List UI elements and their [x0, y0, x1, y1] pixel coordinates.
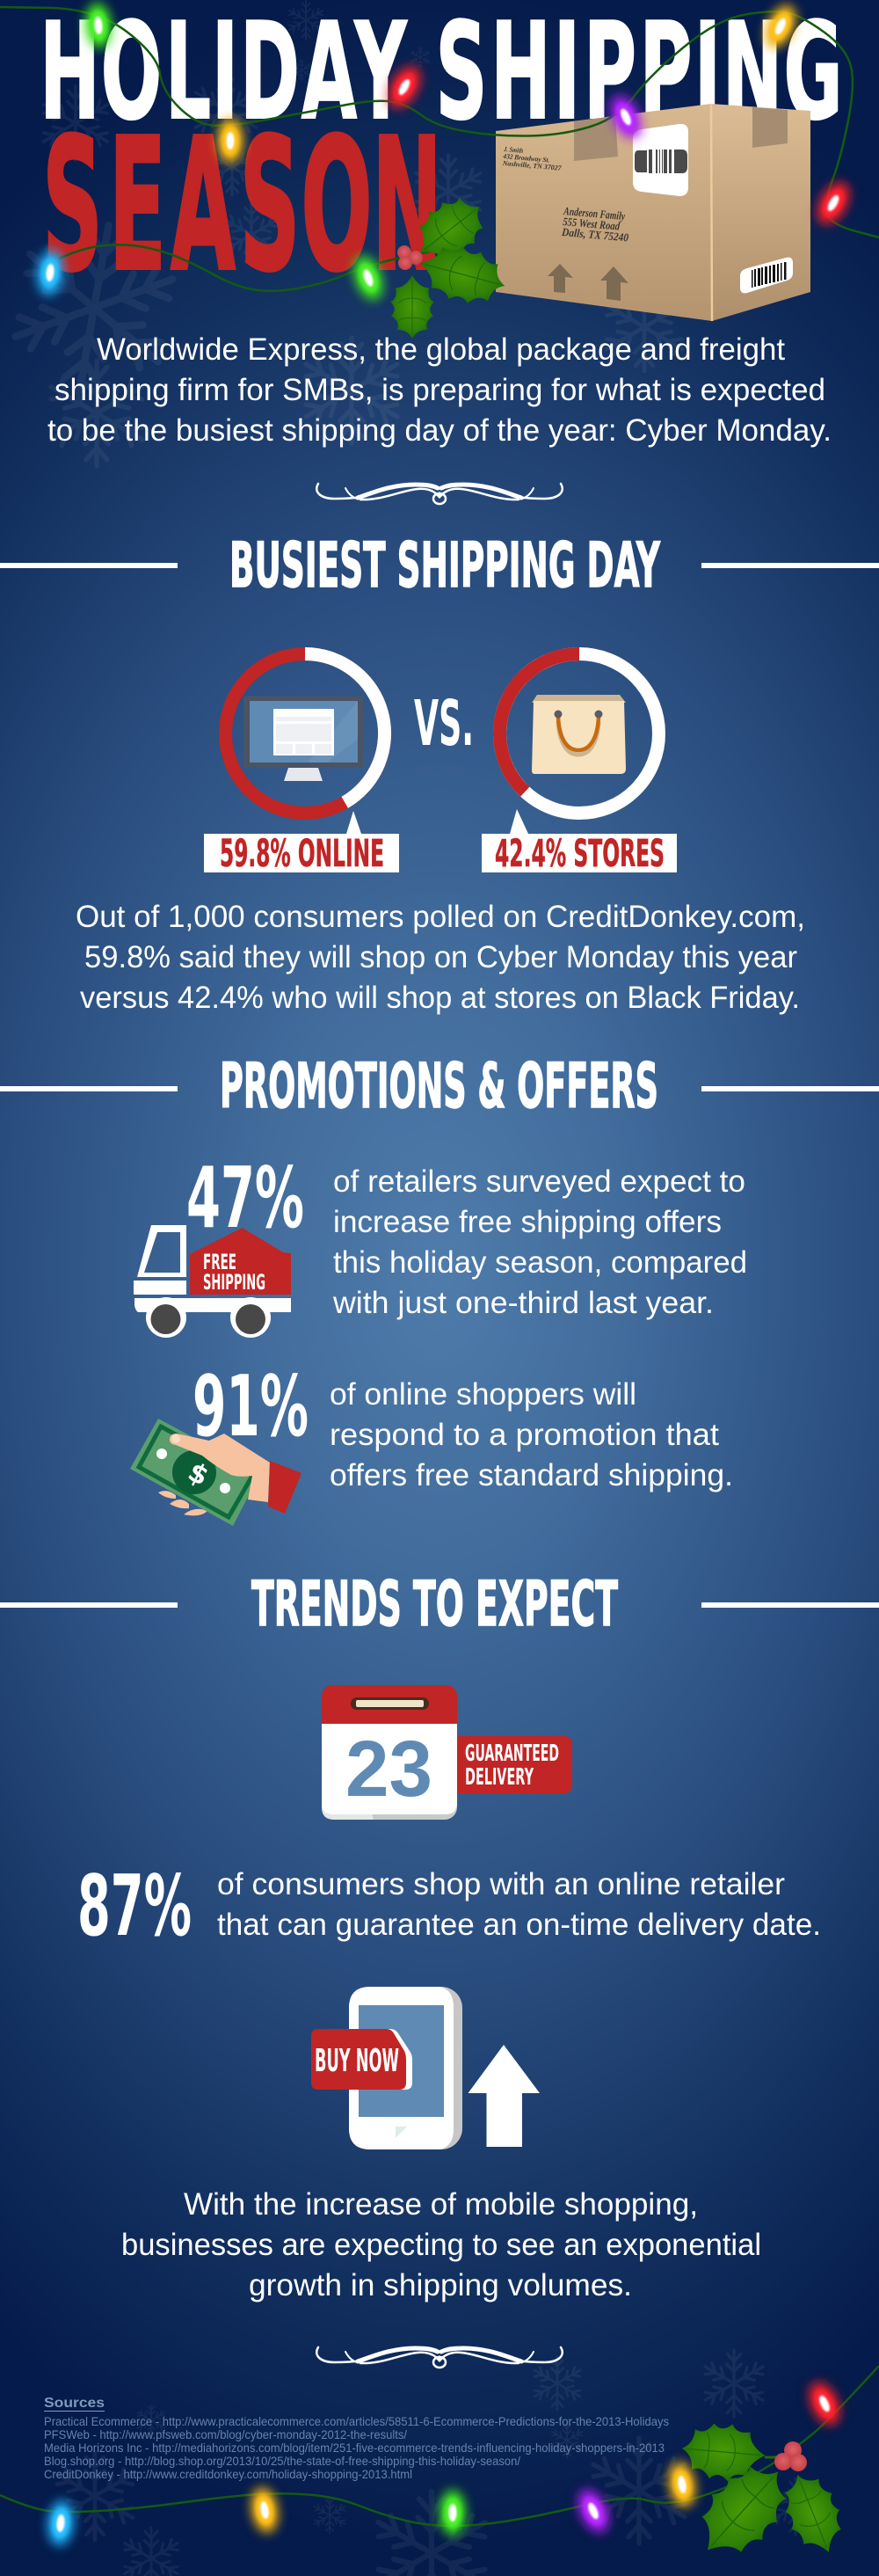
icon: free shipping truck: [134, 1225, 291, 1338]
text: retailers surveyed: with just one-third last year.: [332, 1286, 714, 1320]
text: mobile shopping: With the increase of mobile shopping,: [184, 2187, 698, 2222]
text: poll description: Out of 1,000 consumers polled on CreditDonkey.com,: [76, 900, 805, 934]
text: recipient address: Dalls, TX 75240: [561, 225, 629, 244]
light: red right: [810, 177, 856, 230]
text: retailers surveyed: this holiday season, compared: [333, 1245, 747, 1280]
light: purple bottom: [571, 2485, 615, 2537]
text: recipient address: [561, 204, 631, 244]
arrow: up: [468, 2045, 540, 2147]
text: mobile shopping: businesses are expecting to see an exponential: [121, 2228, 761, 2262]
icon: calendar guaranteed delivery: GUARANTEED: [465, 1740, 559, 1767]
intro text: to be the busiest shipping day of the year: Cyber Monday.: [47, 413, 832, 448]
callout: stores label: [482, 809, 677, 876]
light: purple: [604, 91, 648, 143]
icon: shopping bag: [532, 695, 626, 774]
ornament: divider top: [316, 484, 563, 504]
sources block: Media Horizons Inc - http://mediahorizons.com/blog/item/251-five-ecommerce-trends-influencing-holiday-shoppers-in-2013: [44, 2441, 665, 2455]
icon: free shipping truck: FREE: [203, 1250, 236, 1274]
text: poll description: 59.8% said they will shop on Cyber Monday this year: [84, 940, 797, 974]
text: retailers surveyed: increase free shipping offers: [333, 1205, 722, 1239]
light: yellow left: [217, 118, 243, 164]
light: blue bottom: [46, 2499, 76, 2547]
text: online shoppers: respond to a promotion that: [330, 1418, 719, 1452]
text: on-time delivery: of consumers shop with an online retailer: [217, 1867, 785, 1901]
text: retailers surveyed: [332, 1164, 747, 1320]
sources block: Practical Ecommerce - http://www.practicalecommerce.com/articles/58511-6-Ecommerce-Predictions-for-the-2013-Holidays: [44, 2414, 669, 2428]
text: sender address: J. Smith: [503, 145, 524, 155]
stat: 91 percent: 91%: [193, 1359, 309, 1456]
sources block: Sources: [44, 2396, 105, 2411]
text: online shoppers: offers free standard shipping.: [330, 1458, 733, 1492]
text: sender address: Nashville, TN 37027: [501, 159, 563, 172]
ornament: divider bottom: [316, 2347, 563, 2368]
text: sender address: [501, 145, 563, 172]
intro text: Worldwide Express, the global package and freight: [97, 332, 785, 367]
icon: calendar guaranteed delivery: DELIVERY: [465, 1764, 534, 1791]
string of lights wire: bottom: [0, 2366, 879, 2526]
intro text: [47, 332, 832, 448]
icon: calendar guaranteed delivery: [322, 1685, 572, 1820]
string of lights wire: lower left: [59, 244, 434, 291]
stat: 47 percent: 47%: [186, 1150, 304, 1247]
section divider lines: promotions: [0, 1086, 879, 1091]
string of lights wire: top: [0, 7, 879, 237]
text: on-time delivery: [217, 1867, 821, 1942]
title: season: SEASON: [42, 99, 442, 311]
light: yellow top right: [759, 0, 803, 53]
section divider lines: trends: [0, 1602, 879, 1608]
light: blue: [34, 249, 66, 296]
icon: phone with buy now tag: [311, 1987, 462, 2149]
icon: hand with money: [130, 1419, 301, 1526]
sources block: Blog.shop.org - http://blog.shop.org/2013/10/25/the-state-of-free-shipping-this-holiday-season/: [44, 2454, 520, 2468]
light: yellow bottom: [248, 2485, 281, 2535]
text: sender address: 432 Broadway St.: [502, 152, 550, 164]
text: mobile shopping: [121, 2187, 761, 2302]
text: recipient address: Anderson Family: [563, 204, 626, 223]
text: recipient address: 555 West Road: [563, 215, 621, 233]
text: vs: VS.: [414, 687, 474, 760]
light: red top: [381, 61, 427, 113]
text: poll description: versus 42.4% who will shop at stores on Black Friday.: [80, 981, 800, 1015]
light: green top: [84, 2, 113, 49]
callout: online label: [204, 811, 399, 876]
text: online shoppers: [330, 1377, 733, 1492]
callout: stores label: 42.4% STORES: [495, 832, 665, 876]
icon: shipping box: [496, 104, 810, 321]
stat: 87 percent: 87%: [77, 1858, 192, 1955]
intro text: shipping firm for SMBs, is preparing for what is expected: [54, 373, 825, 407]
icon: holly top: [390, 185, 512, 339]
light: red bottom: [803, 2377, 846, 2430]
donut: online: [225, 654, 385, 813]
icon: hand with money: $: [183, 1456, 214, 1492]
text: online shoppers: of online shoppers will: [330, 1377, 636, 1412]
text: mobile shopping: growth in shipping volumes.: [249, 2268, 632, 2302]
text: retailers surveyed: of retailers surveyed expect to: [333, 1164, 745, 1199]
text: on-time delivery: that can guarantee an on-time delivery date.: [217, 1908, 821, 1942]
text: poll description: [76, 900, 805, 1015]
light: green bottom: [440, 2490, 466, 2536]
icon: phone with buy now tag: BUY NOW: [315, 2043, 399, 2079]
sources block: PFSWeb - http://www.pfsweb.com/blog/cyber-monday-2012-the-results/: [44, 2427, 407, 2441]
sources block: CreditDonkey - http://www.creditdonkey.com/holiday-shopping-2013.html: [44, 2467, 412, 2481]
donut: stores: [499, 654, 659, 813]
icon: holly bottom: [679, 2419, 853, 2573]
light: yellow bottom right: [665, 2460, 699, 2509]
icon: free shipping truck: SHIPPING: [203, 1270, 265, 1295]
icon: monitor: [243, 697, 363, 781]
callout: online label: 59.8% ONLINE: [220, 832, 384, 876]
light: green lower: [348, 252, 389, 304]
icon: calendar guaranteed delivery: 23: [345, 1726, 432, 1813]
section divider lines: busiest shipping day: [0, 563, 879, 568]
sources block: [44, 2396, 669, 2481]
